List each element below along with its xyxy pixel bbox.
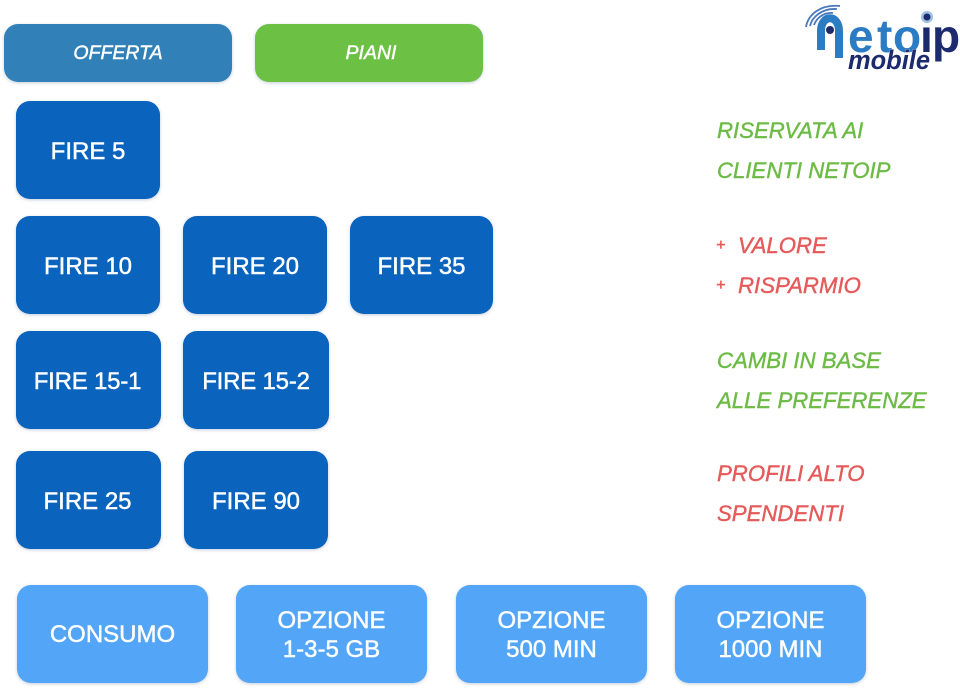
logo: netoip mobile: ı xyxy=(920,10,933,62)
text: + valore + risparmio xyxy=(716,233,861,298)
button: fire 15-1 xyxy=(16,331,161,429)
button: fire 20: FIRE 20 xyxy=(211,252,299,280)
button: fire 15-1: FIRE 15-1 xyxy=(34,368,141,394)
button: fire 20 xyxy=(183,216,327,314)
logo: netoip mobile: mobile xyxy=(848,45,930,75)
logo: netoip mobile xyxy=(805,4,960,75)
button: fire 90 xyxy=(184,451,328,549)
button: opzione 1000 min: OPZIONE xyxy=(716,606,824,634)
tab: offerta xyxy=(4,24,232,82)
text: + valore + risparmio: VALORE xyxy=(738,233,827,258)
text: + valore + risparmio: RISPARMIO xyxy=(738,273,861,298)
button: opzione 1000 min: 1000 MIN xyxy=(718,636,823,662)
button: fire 15-2 xyxy=(183,331,329,429)
button: opzione 1-3-5 gb: 1-3-5 GB xyxy=(283,636,380,662)
button: fire 15-2: FIRE 15-2 xyxy=(202,368,310,394)
button: opzione 1000 min xyxy=(675,585,866,683)
text: cambi in base alle preferenze: ALLE PREFERENZE xyxy=(717,388,927,413)
logo: netoip mobile: p xyxy=(932,10,960,62)
button: fire 35: FIRE 35 xyxy=(377,252,466,280)
button: consumo: CONSUMO xyxy=(50,621,175,648)
text: cambi in base alle preferenze xyxy=(716,348,927,413)
button: fire 10 xyxy=(16,216,160,314)
button: fire 25 xyxy=(16,451,161,549)
text: profili alto spendenti: PROFILI ALTO xyxy=(717,461,865,486)
logo: netoip mobile: o xyxy=(893,10,921,62)
button: opzione 1-3-5 gb xyxy=(236,585,427,683)
button: consumo xyxy=(17,585,208,683)
text: profili alto spendenti xyxy=(717,461,865,526)
tab: offerta: OFFERTA xyxy=(73,42,163,64)
tab: piani: PIANI xyxy=(346,42,396,64)
text: cambi in base alle preferenze: CAMBI IN BASE xyxy=(717,348,881,373)
button: fire 5: FIRE 5 xyxy=(51,138,125,164)
logo: netoip mobile: e xyxy=(848,10,874,62)
button: fire 25: FIRE 25 xyxy=(43,488,132,514)
button: opzione 1-3-5 gb: OPZIONE xyxy=(277,606,386,634)
button: opzione 500 min xyxy=(456,585,647,683)
button: opzione 500 min: 500 MIN xyxy=(506,636,597,662)
button: opzione 500 min: OPZIONE xyxy=(497,606,606,634)
button: fire 5 xyxy=(16,101,160,199)
text: + valore + risparmio: + xyxy=(716,237,725,254)
logo: netoip mobile: t xyxy=(877,10,892,62)
button: fire 35 xyxy=(350,216,493,314)
button: fire 90: FIRE 90 xyxy=(212,488,300,514)
tab: piani xyxy=(255,24,483,82)
text: profili alto spendenti: SPENDENTI xyxy=(717,501,844,526)
text: riservata ai clienti netoip: CLIENTI NETOIP xyxy=(717,158,890,183)
text: + valore + risparmio: + xyxy=(716,277,725,294)
text: riservata ai clienti netoip: RISERVATA AI xyxy=(717,118,863,143)
text: riservata ai clienti netoip xyxy=(717,118,890,183)
button: fire 10: FIRE 10 xyxy=(44,252,132,280)
